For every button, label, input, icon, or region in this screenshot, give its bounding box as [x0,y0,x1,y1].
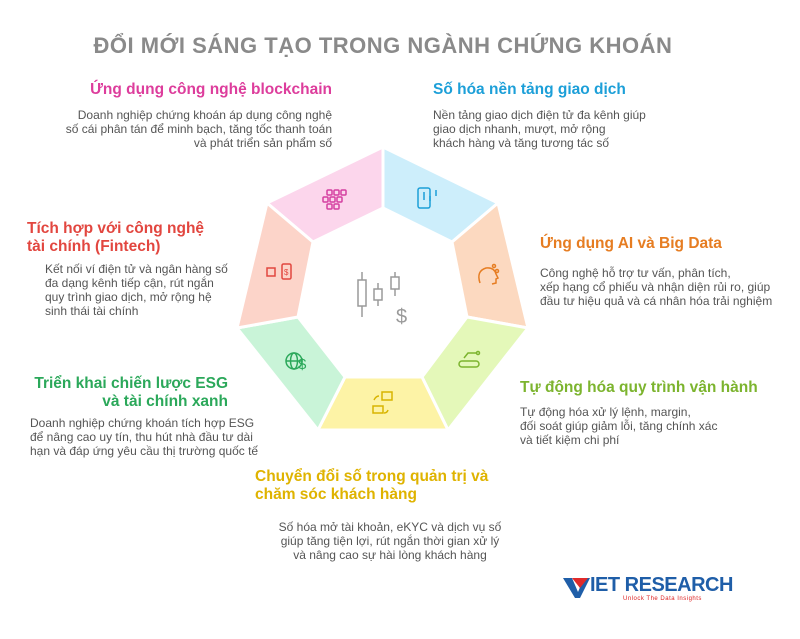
text: ESG: Triển khai chiến lược ESG [34,375,228,392]
text: automation: và tiết kiệm chi phí [520,433,619,447]
segment: mint [237,317,345,430]
text: fintech: sinh thái tài chính [45,304,138,318]
text: blockchain: Doanh nghiệp chứng khoán áp dụng công nghệ [78,108,332,122]
icon: pos phone: $ [284,268,289,277]
segment: pink [267,147,383,242]
text: fintech: tài chính (Fintech) [27,238,160,255]
segment: lime [422,317,528,430]
text: digital trading: giao dịch nhanh, mượt, mở rộng [433,122,606,136]
icon: blockchain [323,190,346,209]
text: ESG: và tài chính xanh [102,393,228,410]
text: blockchain: và phát triển sản phẩm số [194,136,332,150]
logo: IET RESEARCH [590,574,733,596]
text: customer: Chuyển đổi số trong quản trị và [255,468,488,485]
text: automation: Tự động hóa quy trình vận hành [520,379,758,396]
text: digital trading: khách hàng và tăng tương tác số [433,136,609,150]
icon: monitor swap [373,392,392,413]
icon: AI head [479,264,498,284]
icon: globe dollar [286,353,307,373]
icon: center candlesticks [358,272,407,328]
text: AI: Ứng dụng AI và Big Data [540,235,722,252]
text: ESG: hạn và đáp ứng yêu cầu thị trường quốc tế [30,444,258,458]
text: fintech [27,220,228,318]
text: blockchain: Ứng dụng công nghệ blockchain [90,81,332,98]
text: ESG [30,375,258,458]
text: ESG: Doanh nghiệp chứng khoán tích hợp ESG [30,416,254,430]
text: blockchain [66,80,332,150]
text: customer: Số hóa mở tài khoản, eKYC và dịch vụ số [279,520,501,534]
title: ĐỔI MỚI SÁNG TẠO TRONG NGÀNH CHỨNG KHOÁN [94,33,672,58]
segment: blue [383,147,498,242]
text: automation: Tự động hóa xử lý lệnh, margin, [520,405,691,419]
text: customer: giúp tăng tiện lợi, rút ngắn thời gian xử lý [281,534,499,548]
text: AI: xếp hạng cổ phiếu và nhận diện rủi ro, giúp [540,280,770,294]
text: fintech: Tích hợp với công nghệ [27,220,204,237]
text: fintech: đa dạng kênh tiếp cận, rút ngắn [45,276,214,290]
text: digital trading: Số hóa nền tảng giao dịch [433,81,626,98]
icon: center candlesticks: $ [396,306,407,328]
text: customer: và nâng cao sự hài lòng khách hàng [293,548,487,562]
segment: yellow [318,377,448,430]
icon: mobile trading [418,188,436,208]
text: digital trading: Nền tảng giao dịch điện tử đa kênh giúp [433,108,646,122]
text: blockchain: số cái phân tán để minh bạch, tăng tốc thanh toán [66,122,332,136]
text: fintech: Kết nối ví điện tử và ngân hàng số [45,262,228,276]
icon: robot conveyor [459,352,480,367]
text: automation: đối soát giúp giảm lỗi, tăng chính xác [520,419,717,433]
text: customer: chăm sóc khách hàng [255,486,417,503]
text: AI: Công nghệ hỗ trợ tư vấn, phân tích, [540,266,731,280]
text: automation [520,379,758,447]
icon: globe dollar: $ [298,356,307,373]
text: customer [255,468,501,562]
segment: salmon [237,203,313,328]
icon: pos phone [267,264,291,279]
text: fintech: quy trình giao dịch, mở rộng hệ [45,290,212,304]
text: digital trading [433,81,646,150]
text: AI [540,234,772,308]
segment: orange [452,203,528,328]
logo [563,574,733,602]
logo: Unlock The Data Insights [623,596,702,602]
text: ESG: để nâng cao uy tín, thu hút nhà đầu tư dài [30,430,253,444]
text: AI: đầu tư hiệu quả và cá nhân hóa trải nghiệm [540,294,772,308]
